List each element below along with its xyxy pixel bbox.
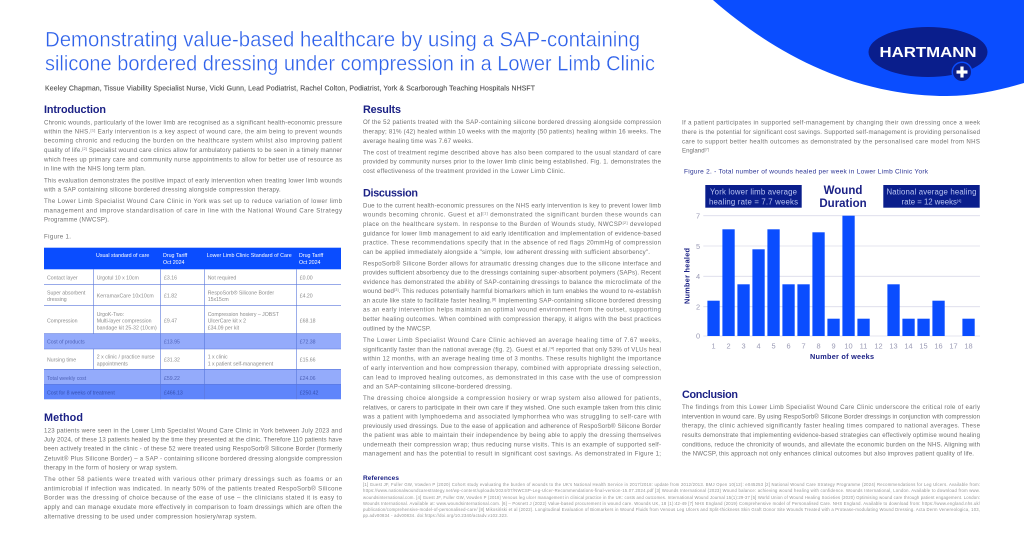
- text block: references: pp.adv00834 - adv00834. doi:https://doi.org/10.2340/actadv.v102.323.: [363, 513, 508, 518]
- callout: national healing rate: rate = 12 weeks: [902, 198, 957, 206]
- text block: discussion: Due to the current health-economic pressures on the NHS early intervention is key to prevent lower limb: [363, 202, 662, 209]
- text block: discussion: relatives, or carers to participate in their own care if they wished. One such example taken from this clinic: [363, 404, 661, 411]
- chart title: wound duration: [819, 185, 867, 210]
- table body rows: UrgoK-Two:: [97, 312, 124, 318]
- text block: references: woundsinternational.com. [4] Guest JF, Fuller GW, Vowden P (2018) Venous leg ulcer management in clinical practice in the UK: costs and outcomes. International Wound Journal 15(1):29-37 [5] World Union of Wound Healing Societies (2020) Optimising wound care through patient engagement. London:: [363, 495, 980, 500]
- text block: discussion: [362, 202, 662, 458]
- x axis labels: 4: [756, 342, 761, 350]
- table header: Lower Limb Clinic Standard of Care: [207, 253, 292, 259]
- callout: national healing rate: National average healing: [886, 188, 976, 196]
- table cost rows: Cost for 8 weeks of treatment: [47, 391, 115, 397]
- text block: introduction: with a SAP containing silicone bordered dressing alongside compression therapy.: [43, 186, 281, 193]
- x axis labels: 2: [726, 342, 731, 350]
- callout: national healing rate: [4]: [957, 198, 961, 203]
- text block: method: Border was the dressing of choice because of the ease of use – the clinicians stated it is easy to: [44, 495, 343, 502]
- table body rows: Contact layer: [47, 275, 78, 281]
- heading: method: Method: [44, 412, 83, 424]
- text block: discussion: practice. These recommendations specify that in the absence of red flags 20mmHg of compression: [363, 240, 661, 247]
- text block: results: cost effectiveness of the treatment provided in the Lower Limb Clinic.: [363, 168, 565, 175]
- chart title: wound duration: Wound: [824, 185, 862, 197]
- heading: conclusion: Conclusion: [682, 389, 738, 401]
- text block: discussion: developed: [628, 221, 661, 228]
- text block: discussion: RespoSorb® Silicone Border allows for atraumatic dressing changes due to the silicone interface and: [363, 260, 661, 267]
- text block: self-management continued: [682, 120, 981, 155]
- table body rows: 1 x patient self-management: [208, 361, 274, 367]
- x axis labels: 8: [816, 342, 821, 350]
- logo: Hartmann: [868, 27, 988, 82]
- text block: discussion: significantly faster than the national average (fig. 2). Guest et al.: [363, 346, 549, 353]
- text block: discussion: the patient was able to maintain their independence by being able to apply the dressing themselves: [363, 432, 661, 439]
- callout: York healing rate: [705, 185, 802, 208]
- table body rows: appointments: [97, 361, 128, 367]
- text block: conclusion: the NWCSP, this approach not only enhances clinical outcomes but also improves patient quality of life.: [682, 451, 974, 458]
- table body rows: £3.16: [164, 275, 177, 281]
- text block: method: July 2024, of these 13 patients healed by the time they presented at the clinic. Therefore 110 patients have: [44, 436, 343, 443]
- text block: self-management continued: there is the potential for significant cost savings. Supported self-management is providing personalised: [682, 129, 980, 136]
- text block: method: Zetuvit® Plus Silicone Border) – a SAP - containing silicone bordered dressing alongside compression: [44, 455, 342, 462]
- text block: discussion: wounds becoming chronic. Guest et al: [363, 212, 482, 219]
- text block: discussion: guidance for lower limb management to aid early identification and implementation of evidence-based: [363, 230, 661, 237]
- text block: introduction: Early intervention is a key aspect of wound care, the aim being to prevent wounds: [96, 128, 342, 135]
- logo: Hartmann: HARTMANN: [880, 44, 976, 61]
- text block: conclusion: intervention in wound care. By using RespoSorb® Silicone Border dressings in conjunction with compression: [682, 413, 980, 420]
- text block: method: [44, 427, 343, 521]
- text block: results: [363, 119, 662, 175]
- table cost rows: £72.38: [300, 340, 316, 346]
- text block: conclusion: therapy, the clinic achieved significantly faster healing times compared to national averages. These: [682, 423, 981, 430]
- y axis labels: [696, 212, 700, 340]
- x axis labels: 17: [949, 342, 958, 350]
- table body rows: Nursing time: [47, 358, 76, 364]
- table body rows: Super absorbent: [47, 290, 86, 296]
- table body rows: £9.47: [164, 318, 177, 324]
- text block: discussion: [3]: [394, 288, 399, 292]
- table cost rows: £13.95: [164, 340, 180, 346]
- table body rows: [47, 275, 316, 367]
- x axis labels: 14: [904, 342, 913, 350]
- header curve: [713, 0, 1024, 96]
- y axis labels: 2: [696, 302, 700, 312]
- text block: discussion: reported that only 53% of VLUs heal: [554, 346, 661, 353]
- text block: discussion: within 12 months, with an average healing time of 3 months. These results highlight the importance: [362, 356, 662, 363]
- bars: [707, 216, 975, 336]
- table body rows: 1 x clinic: [208, 355, 228, 361]
- table header: Oct 2024: [299, 260, 321, 266]
- x axis labels: 11: [860, 342, 867, 350]
- text block: method: antimicrobial if infection was indicated. In nearly 50% of the patients treated RespoSorb® Silicone: [44, 485, 343, 492]
- chart title: wound duration: Duration: [819, 198, 867, 210]
- text block: introduction: [1]: [91, 128, 95, 132]
- text block: introduction: The Lower Limb Specialist Wound Care Clinic in York was set up to reduce variation of lower limb: [44, 198, 343, 205]
- callout: York healing rate: York lower limb average: [710, 188, 797, 196]
- x axis labels: 1: [711, 342, 716, 350]
- text block: introduction: This evaluation demonstrates the positive impact of early intervention when treating lower limb wounds: [44, 177, 342, 184]
- bar chart: wounds healed per week: [682, 212, 980, 361]
- text block: introduction: Chronic wounds, particularly of the lower limb are recognised as a significant health-economic pressure: [44, 119, 343, 126]
- panel: results: [363, 104, 662, 175]
- text block: discussion: of early intervention and how compression therapy, combined with appropriate dressing selection,: [363, 365, 661, 372]
- text block: method: The other 58 patients were treated with various other primary dressings such as foams or an: [44, 476, 342, 483]
- text block: introduction: within the NHS.: [44, 128, 90, 135]
- table body rows: 15x15cm: [208, 297, 229, 303]
- text block: conclusion: The findings from this Lower Limb Specialist Wound Care Clinic underscore the critical role of early: [682, 404, 981, 411]
- text block: discussion: The Lower Limb Specialist Wound Care Clinic achieved an average healing time of 7.67 weeks,: [363, 337, 661, 344]
- text block: method: alternative dressing to be used under compression hosiery/wrap system.: [44, 514, 257, 521]
- x axis labels: 3: [741, 342, 746, 350]
- text block: discussion: provides sufficient absorbency due to the dressings containing super-absorbent polymers (SAPs). Recent: [363, 270, 661, 277]
- text block: references: Wounds International. Available at: www.woundsinternational.com. [6] – Posnett J (2022) Value-based procurement in wound care. Wounds UK, 18 (1):42-49 [7] NHS England (2019) Comprehensive model of Personalised Care. NHS England. Available to download from: https://www.england.nhs.uk/: [363, 501, 981, 506]
- y axis labels: 5: [696, 242, 700, 251]
- table cost rows: £250.42: [300, 391, 319, 397]
- table body rows: dressing: [47, 297, 67, 303]
- table body rows: UlcerCare kit x 2: [208, 319, 246, 325]
- table body rows: £1.82: [164, 294, 177, 300]
- figure 2 caption: Figure 2. - Total number of wounds healed per week in Lower Limb Clinic York: [684, 168, 929, 175]
- callout: York healing rate: healing rate = 7.7 weeks: [709, 198, 798, 206]
- text block: discussion: [2]: [623, 221, 628, 225]
- text block: method: 123 patients were seen in the Lower Limb Specialist Wound Care Clinic in York between July 2023 and: [44, 427, 342, 434]
- text block: discussion: can be applied immediately alongside a "simple, low adherent dressing with sufficient absorbency".: [363, 249, 650, 256]
- text block: discussion: an acute like state to facilitate faster healing.: [363, 297, 492, 304]
- text block: discussion: demonstrated the significant burden these wounds can: [488, 212, 661, 219]
- text block: discussion: . This reduces potentially harmful biomarkers which in turn enables the wound to re-establish: [399, 288, 661, 295]
- panel: discussion: [362, 188, 662, 458]
- text block: introduction: becoming chronic and reducing the burden on the healthcare system whilst also improving patient: [44, 138, 342, 145]
- table: cost comparison: [44, 248, 341, 399]
- panel: references: [363, 475, 981, 518]
- table cost rows: Total weekly cost: [47, 376, 87, 382]
- table cost rows: £24.06: [300, 376, 316, 382]
- table body rows: bandage kit 25-32 (10cm): [97, 325, 157, 331]
- x axis labels: 10: [844, 342, 853, 350]
- text block: references: publication/comprehensive-model-of-personalised-care/ [8] Mikosiński et al (2022). Longitudinal Evaluation of Biomarkers in Wound Fluids from Venous Leg Ulcers and Split-thickness Skin Graft Donor Site Wounds Treated with a Protease-modulating Wound Dressing. Acta Derm Venereologica, 103,: [363, 507, 980, 512]
- text block: results: The cost of treatment regime described above has also been compared to the usual standard of care: [363, 149, 662, 156]
- x axis labels: 16: [934, 342, 943, 350]
- table header: Oct 2024: [163, 260, 185, 266]
- table header: Drug Tariff: [299, 253, 324, 259]
- text block: self-management continued: care to support better health outcomes as demonstrated by the personalised care model from NHS: [682, 138, 980, 145]
- text block: discussion: was a patient with lymphoedema and associated lymphorrhea who was struggling to self-care with: [362, 414, 661, 421]
- y axis labels: 0: [696, 332, 700, 340]
- table cost rows: £466.13: [164, 391, 183, 397]
- heading: discussion: Discussion: [363, 188, 418, 200]
- text block: discussion: previously used dressings. Due to the ease of application and adherence of RespoSorb® Silicone Border: [363, 423, 661, 430]
- callout: national healing rate: [883, 185, 980, 208]
- text block: conclusion: [682, 404, 981, 458]
- text block: discussion: place on the healthcare system. In response to the Burden of Wounds study, NWCSP: [363, 221, 622, 228]
- text block: method: therapy in the form of hosiery or wrap system.: [44, 465, 178, 472]
- text block: results: provided by community nurses prior to the lower limb clinic being established. Fig. 1. demonstrates the: [363, 159, 662, 166]
- table body rows: Not required: [208, 275, 236, 281]
- x axis labels: [711, 342, 973, 350]
- text block: discussion: can lead to improved healing outcomes, as demonstrated in this case with the use of compression: [363, 374, 661, 381]
- text block: results: therapy; 81% (42) healed within 10 weeks with the majority (50 patients) healing within 16 weeks. The: [363, 128, 662, 135]
- text block: self-management continued: England: [682, 148, 705, 155]
- panel: method: [44, 412, 343, 521]
- title: [45, 28, 655, 76]
- table body rows: £34.09 per kit: [208, 325, 240, 331]
- table body rows: £68.18: [300, 318, 316, 324]
- x axis labels: 6: [786, 342, 791, 350]
- x axis labels: 13: [889, 342, 898, 350]
- x axis labels: 7: [801, 342, 806, 350]
- text block: discussion: underneath their compression wrap; thus reducing nurse visits. This is an example of supported self-: [363, 441, 661, 448]
- text block: discussion: evidence has demonstrated the ability of SAP-containing dressings to balance the microclimate of the: [363, 279, 662, 286]
- x axis labels: 12: [874, 342, 883, 350]
- figure 1 caption: Figure 1.: [44, 234, 71, 240]
- text block: discussion: Implementing SAP-containing silicone bordered dressing: [497, 297, 661, 304]
- text block: introduction: management and improve standardisation of care in line with the National Wound Care Strategy: [44, 207, 343, 214]
- table body rows: Urgotul 10 x 10cm: [97, 275, 139, 281]
- text block: introduction: quality of life.: [44, 147, 82, 154]
- table body rows: 2 x clinic / practice nurse: [97, 355, 155, 361]
- text block: discussion: better healing outcomes. When combined with compression therapy, it aligns with the best practices: [363, 316, 661, 323]
- text block: introduction: which frees up primary care and community nurse appointments to allow for better use of resource as: [43, 156, 342, 163]
- text block: discussion: [4]: [549, 346, 554, 350]
- text block: discussion: wound bed: [363, 288, 394, 295]
- authors: Keeley Chapman, Tissue Viability Specialist Nurse, Vicki Gunn, Lead Podiatrist, Rachel Colton, Podiatrist, York & Scarborough Teaching Hospitals NHSFT: [45, 86, 536, 92]
- table body rows: KerramaxCare 10x10cm: [97, 294, 154, 300]
- text block: self-management continued: If a patient participates in supported self-management by changing their own dressing once a week: [682, 120, 981, 127]
- y axis labels: 7: [696, 212, 700, 220]
- text block: discussion: The dressing choice alongside a compression hosiery or wrap system also allowed for patients,: [363, 395, 661, 402]
- text block: discussion: [8]: [492, 297, 496, 301]
- text block: discussion: outlined by the NWCSP.: [363, 325, 431, 332]
- table cost rows: [47, 340, 319, 397]
- title: Demonstrating value-based healthcare by using a SAP-containing: [45, 28, 640, 52]
- x axis labels: 15: [919, 342, 928, 350]
- text block: discussion: management and has the potential to result in significant cost savings. As demonstrated in Figure 1;: [363, 451, 661, 458]
- title: silicone bordered dressing under compression in a Lower Limb Clinic: [45, 52, 655, 76]
- text block: discussion: as an early intervention helps maintain an optimal wound environment from the outset, supporting: [363, 307, 661, 314]
- text block: discussion: and an SAP-containing silicone-bordered dressing.: [363, 384, 512, 391]
- x axis labels: 9: [831, 342, 836, 350]
- text block: introduction: in line with the NHS long term plan.: [44, 166, 146, 173]
- text block: self-management continued: [7]: [705, 148, 709, 152]
- text block: method: apply and can manage exudate more effectively in comparison to foam dressings which are often the: [44, 504, 343, 511]
- text block: references: [1] Guest JF, Fuller GW, Vowden P (2020) Cohort study evaluating the burden of wounds to the UK's National Health Service in 2017/2018: update from 2012/2013. BMJ Open 10(12): e045253 [2] National Wound Care Strategy Programme (2024) Recommendations for Leg Ulcers. Available from:: [363, 482, 980, 487]
- y axis labels: 4: [696, 272, 700, 281]
- x axis labels: 18: [964, 342, 973, 350]
- text block: introduction: [2]: [82, 147, 87, 151]
- table cost rows: £59.22: [164, 376, 180, 382]
- table body rows: Compression: [47, 318, 78, 324]
- heading: references: References: [363, 475, 399, 482]
- text block: results: average healing time was 7.67 weeks.: [363, 138, 473, 145]
- text block: discussion: [1]: [483, 212, 488, 216]
- text block: introduction: [43, 119, 343, 224]
- x axis title: Number of weeks: [810, 352, 874, 361]
- table body rows: Compression hosiery – JOBST: [208, 312, 280, 318]
- y axis title: Number healed: [682, 248, 692, 304]
- text block: references: [363, 482, 981, 518]
- text block: introduction: Specialist wound care clinics allow for ambulatory patients to be seen in a timely manner: [87, 147, 342, 154]
- heading: introduction: Introduction: [44, 104, 106, 116]
- text block: conclusion: conditions, reduce the chronicity of wounds, and alleviate the economic burden on the NHS. Aligning with: [682, 441, 980, 448]
- table body rows: Multi-layer compression: [97, 319, 152, 325]
- panel: conclusion: [682, 389, 981, 458]
- table header: Drug Tariff: [163, 253, 188, 259]
- text block: results: Of the 52 patients treated with the SAP-containing silicone bordered dressing alongside compression: [363, 119, 661, 126]
- text block: references: https://www.nationalwoundcarestrategy.net/wp-content/uploads/2024/07/NWCSP-Leg-Ulcer-Recommendations-final-version-15.07.2024.pdf [3] Wounds International (2023) Wound balance: achieving wound healing with confidence. Wounds International, London. Available to download from www.: [363, 488, 980, 493]
- text block: introduction: Programme (NWCSP).: [44, 217, 109, 224]
- table body rows: £4.20: [300, 294, 313, 300]
- table header: [96, 253, 324, 266]
- table body rows: RespoSorb® Silicone Border: [208, 289, 274, 296]
- table body rows: £15.66: [300, 358, 316, 364]
- table header: Usual standard of care: [96, 253, 149, 259]
- table body rows: £0.00: [300, 275, 313, 281]
- table cost rows: Cost of products: [47, 340, 85, 346]
- x axis labels: 5: [771, 342, 776, 350]
- text block: conclusion: results demonstrate that implementing evidence-based strategies can effectively optimise wound healing: [682, 432, 980, 439]
- heading: results: Results: [363, 104, 401, 116]
- table body rows: £31.32: [164, 358, 180, 364]
- panel: introduction: [43, 104, 343, 224]
- text block: method: been actively treated in the clinic - of these 52 were treated using RespoSorb® Silicone Border (formerly: [44, 446, 343, 453]
